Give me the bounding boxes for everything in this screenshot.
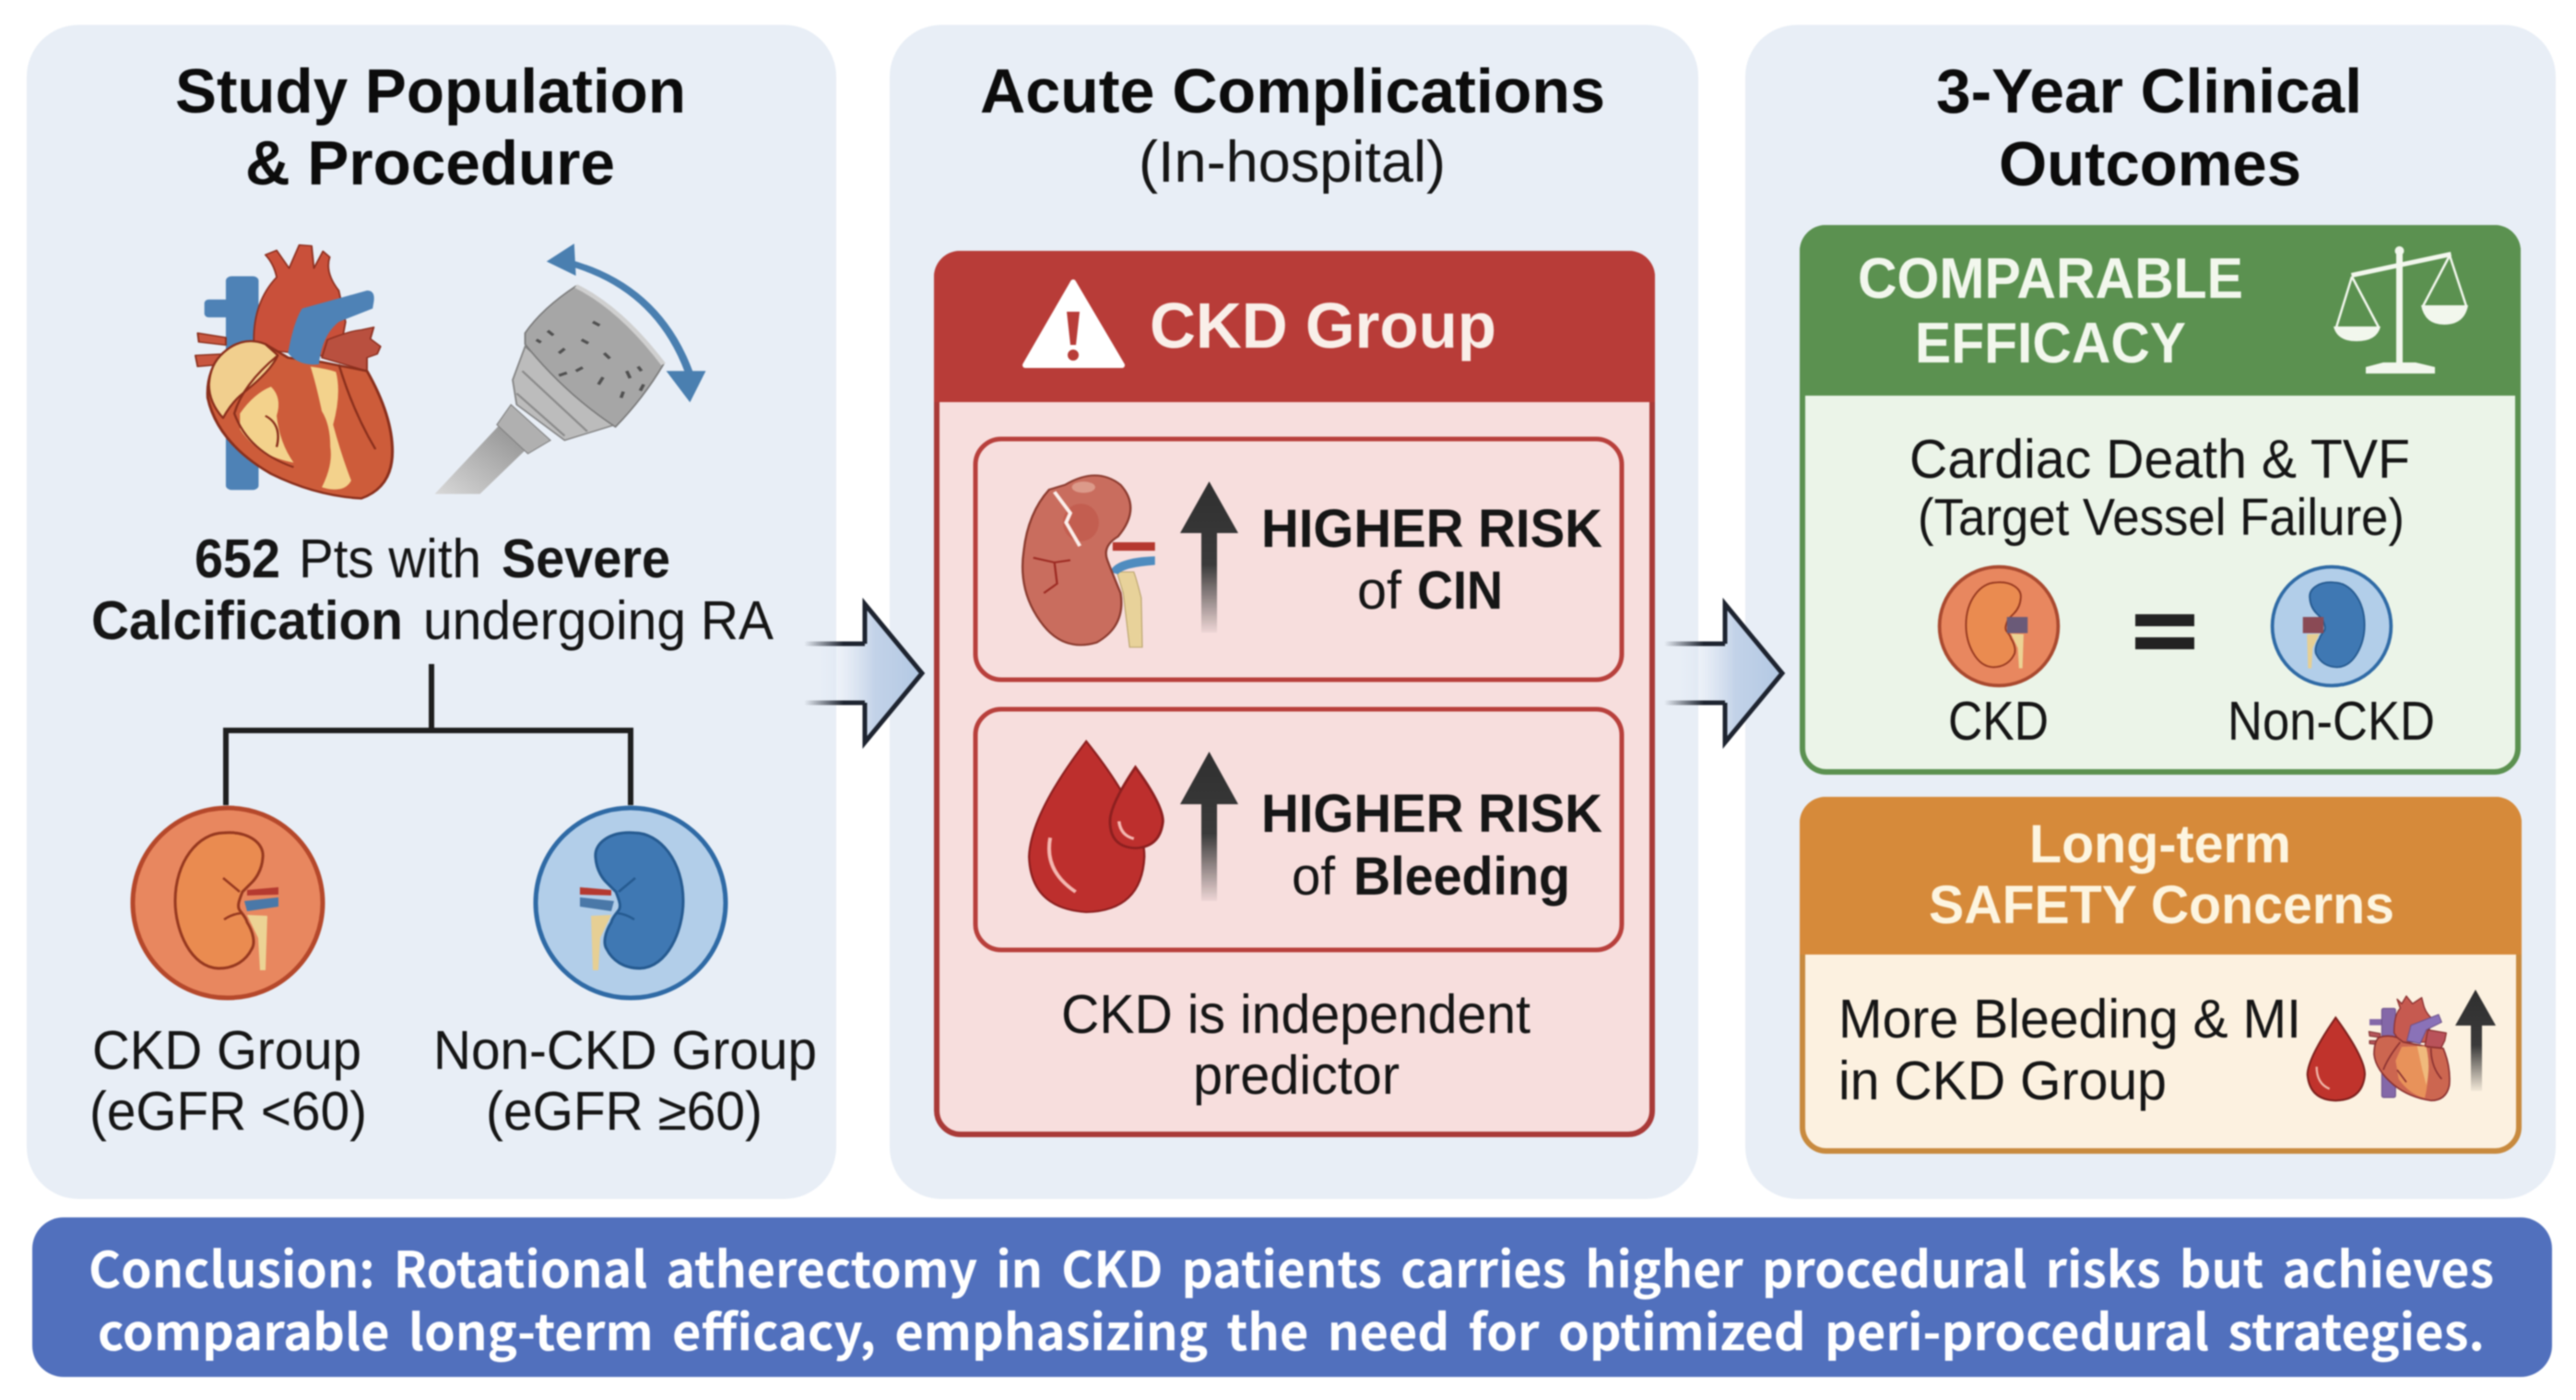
text: patient count: undergoing RA <box>423 590 774 651</box>
heading: comparable efficacy: COMPARABLE <box>1858 247 2243 311</box>
label: non-CKD group: (eGFR ≥60) <box>486 1081 762 1142</box>
text: bleeding and MI: More Bleeding & MI <box>1838 989 2301 1050</box>
label: non-CKD group <box>433 1020 817 1142</box>
text: independent predictor: predictor <box>1193 1045 1400 1106</box>
card: risk of CIN <box>975 439 1622 680</box>
callout: CKD group <box>934 251 1655 1134</box>
text: bleeding and MI: in CKD Group <box>1838 1050 2167 1111</box>
label: CKD group: CKD Group <box>92 1020 361 1081</box>
text: independent predictor: CKD is independent <box>1061 984 1530 1045</box>
icon: blood drop <box>2308 1017 2365 1100</box>
icon: non-CKD kidney <box>536 808 726 998</box>
text: endpoints: Cardiac Death & TVF <box>1909 429 2410 490</box>
heading: safety concerns: Long-term <box>2029 814 2291 874</box>
panel: acute complications <box>890 25 1698 1199</box>
arrow: increased risk <box>2455 990 2496 1091</box>
heading: study population <box>175 56 686 198</box>
heading: acute complications: Acute Complications <box>980 56 1605 126</box>
text: higher risk of bleeding <box>1261 784 1602 907</box>
card: risk of bleeding <box>975 709 1622 950</box>
text: higher risk of CIN: of <box>1357 561 1402 621</box>
conclusion banner <box>32 1217 2552 1377</box>
callout: long-term safety concerns <box>1800 797 2522 1151</box>
text: higher risk of bleeding: of <box>1292 847 1336 907</box>
text: patient count: 652 <box>195 528 280 589</box>
text: conclusion <box>89 1229 2494 1365</box>
icon: small heart <box>2369 996 2450 1100</box>
panel: study population and procedure <box>27 25 836 1199</box>
text: patient count <box>91 528 774 651</box>
label: CKD group: (eGFR <60) <box>89 1081 367 1142</box>
heading: study population: & Procedure <box>245 128 615 198</box>
text: conclusion: comparable long-term efficacy, emphasizing the need for optimized peri-procedural strategies. <box>98 1292 2485 1365</box>
icon: blood drops <box>1029 742 1163 912</box>
label: non-CKD group: Non-CKD Group <box>433 1020 817 1081</box>
text: conclusion: Conclusion: Rotational atherectomy in CKD patients carries higher procedural risks but achieves <box>89 1229 2494 1302</box>
text: endpoints <box>1909 429 2410 547</box>
text: higher risk of CIN <box>1261 499 1602 621</box>
heading: clinical outcomes <box>1936 56 2362 199</box>
heading: comparable efficacy <box>1858 247 2243 375</box>
heading: comparable efficacy: EFFICACY <box>1915 312 2186 375</box>
label: CKD group <box>89 1020 367 1142</box>
equals sign <box>2135 614 2194 649</box>
heading: safety concerns: SAFETY Concerns <box>1929 875 2394 935</box>
arrow: complications to outcomes <box>1664 601 1783 745</box>
labels: CKD and non-CKD: CKD <box>1948 691 2049 752</box>
heading: safety concerns <box>1929 814 2394 935</box>
icon: rotational atherectomy burr <box>435 243 706 494</box>
heading: acute complications <box>980 56 1605 195</box>
heading: clinical outcomes: 3-Year Clinical <box>1936 56 2362 126</box>
arrow: increased risk <box>1180 752 1238 901</box>
icon: heart with calcification <box>195 245 393 498</box>
text: higher risk of bleeding: Bleeding <box>1353 847 1570 907</box>
text: patient count: Severe <box>502 528 670 589</box>
icon: CKD kidney <box>133 808 323 998</box>
text: higher risk of CIN: HIGHER RISK <box>1261 499 1602 559</box>
heading: CKD group: CKD Group <box>1150 290 1496 362</box>
arrow: increased risk <box>1180 481 1238 633</box>
icon: small CKD kidney <box>1940 567 2058 685</box>
panel: 3-year clinical outcomes <box>1745 25 2556 1199</box>
heading: acute complications: (In-hospital) <box>1139 130 1446 195</box>
text: higher risk of CIN: CIN <box>1417 561 1503 621</box>
icon: damaged kidney <box>1022 476 1155 647</box>
text: bleeding and MI <box>1838 989 2301 1111</box>
tree connector <box>226 664 631 805</box>
icon: small non-CKD kidney <box>2273 567 2391 685</box>
text: endpoints: (Target Vessel Failure) <box>1918 488 2405 547</box>
labels: CKD and non-CKD <box>1948 691 2435 752</box>
heading: clinical outcomes: Outcomes <box>1999 129 2301 199</box>
text: patient count: Calcification <box>91 590 403 651</box>
icon: balance scale <box>2334 246 2468 374</box>
arrow: population to complications <box>804 601 923 745</box>
text: patient count: Pts with <box>299 528 481 589</box>
callout: comparable efficacy <box>1800 225 2521 772</box>
icon: warning triangle <box>1025 282 1122 365</box>
text: independent predictor <box>1061 984 1530 1106</box>
heading: study population: Study Population <box>175 56 686 126</box>
labels: CKD and non-CKD: Non-CKD <box>2227 691 2435 752</box>
text: higher risk of bleeding: HIGHER RISK <box>1261 784 1602 844</box>
